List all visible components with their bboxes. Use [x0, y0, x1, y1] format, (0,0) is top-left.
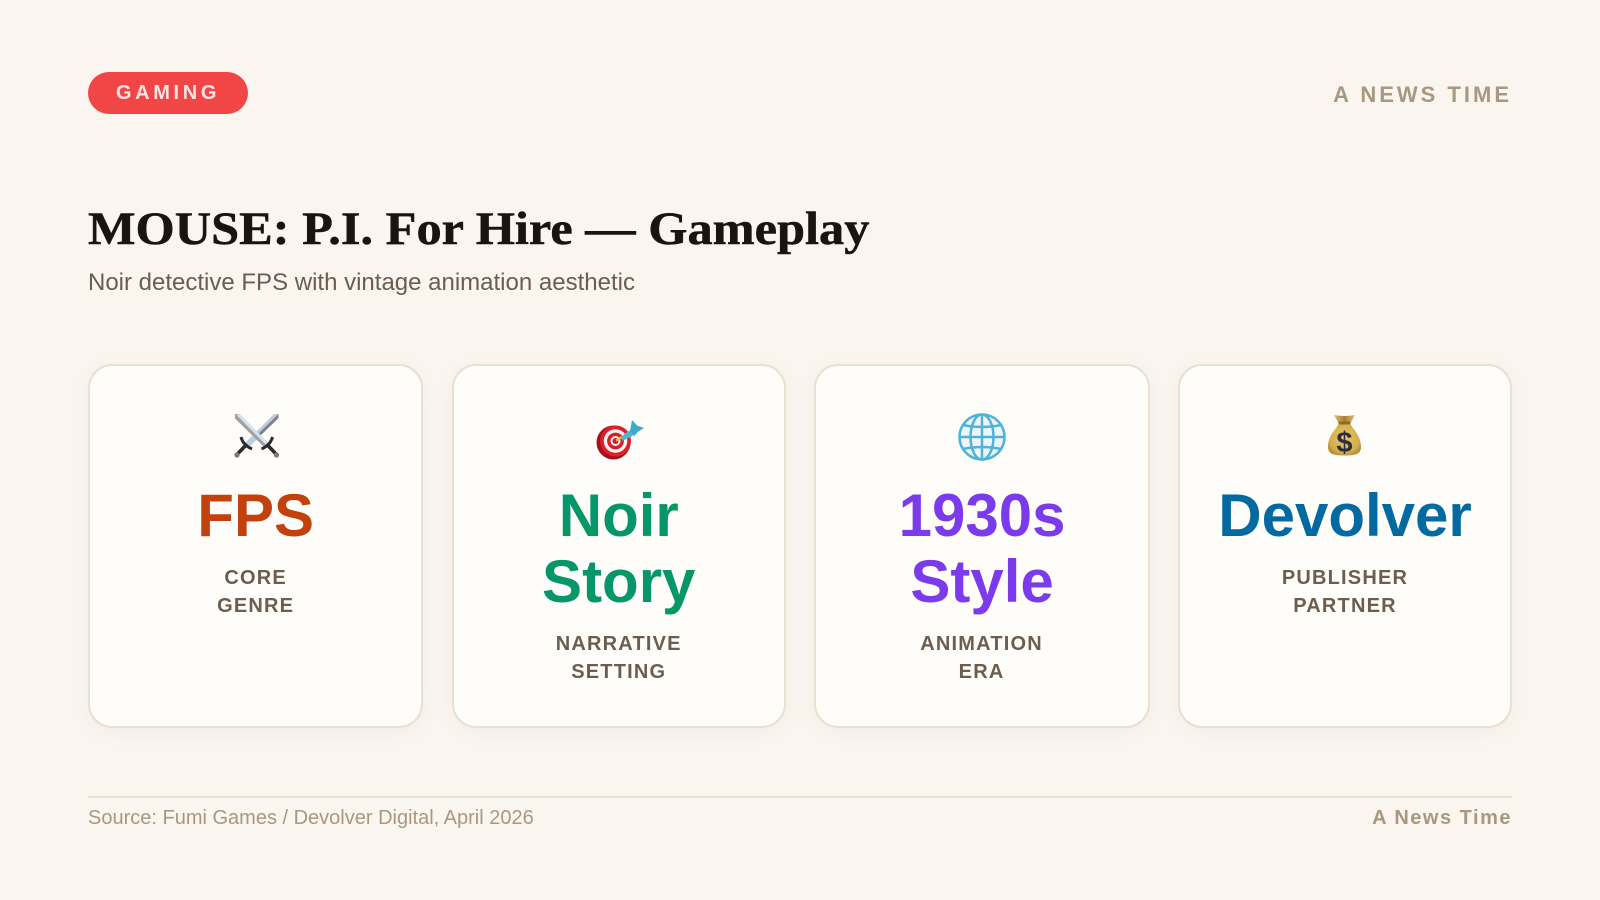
Noir Story value: Noir	[559, 482, 679, 548]
1930s Style value	[899, 482, 1066, 614]
label	[556, 633, 682, 683]
brand name: A NEWS TIME	[1333, 82, 1512, 107]
label	[920, 633, 1043, 683]
label: PARTNER	[1293, 595, 1397, 617]
title: MOUSE: P.I. For Hire — Gameplay	[88, 203, 869, 255]
icon: bullseye dart	[596, 420, 644, 460]
category pill: GAMING	[116, 82, 220, 104]
Noir Story value	[542, 482, 695, 614]
label: GENRE	[217, 595, 294, 617]
icon: crossed swords	[234, 414, 280, 458]
label	[1282, 567, 1408, 617]
label: NARRATIVE	[556, 633, 682, 655]
Devolver value: Devolver	[1218, 482, 1472, 548]
category pill	[88, 72, 248, 114]
panel: Devolver publisher partner	[1178, 364, 1512, 728]
1930s Style value: 1930s	[899, 482, 1066, 548]
panel: 1930s Style animation era	[814, 364, 1150, 728]
icon: money bag: $	[1336, 427, 1353, 459]
1930s Style value: Style	[910, 548, 1054, 614]
icon: money bag	[1328, 415, 1361, 459]
label: ERA	[959, 661, 1004, 683]
footer rule and text	[88, 796, 1512, 836]
label	[217, 567, 294, 617]
FPS value: FPS	[197, 482, 314, 548]
label: SETTING	[571, 661, 666, 683]
label: PUBLISHER	[1282, 567, 1408, 589]
panel: Noir Story narrative setting	[452, 364, 786, 728]
label: CORE	[224, 567, 287, 589]
subtitle: Noir detective FPS with vintage animation aesthetic	[88, 269, 635, 296]
label: ANIMATION	[920, 633, 1043, 655]
source note: Source: Fumi Games / Devolver Digital, April 2026	[88, 807, 534, 829]
Noir Story value: Story	[542, 548, 695, 614]
icon: globe	[958, 413, 1006, 461]
footer brand: A News Time	[1372, 807, 1512, 829]
panel: FPS core genre	[88, 364, 423, 728]
